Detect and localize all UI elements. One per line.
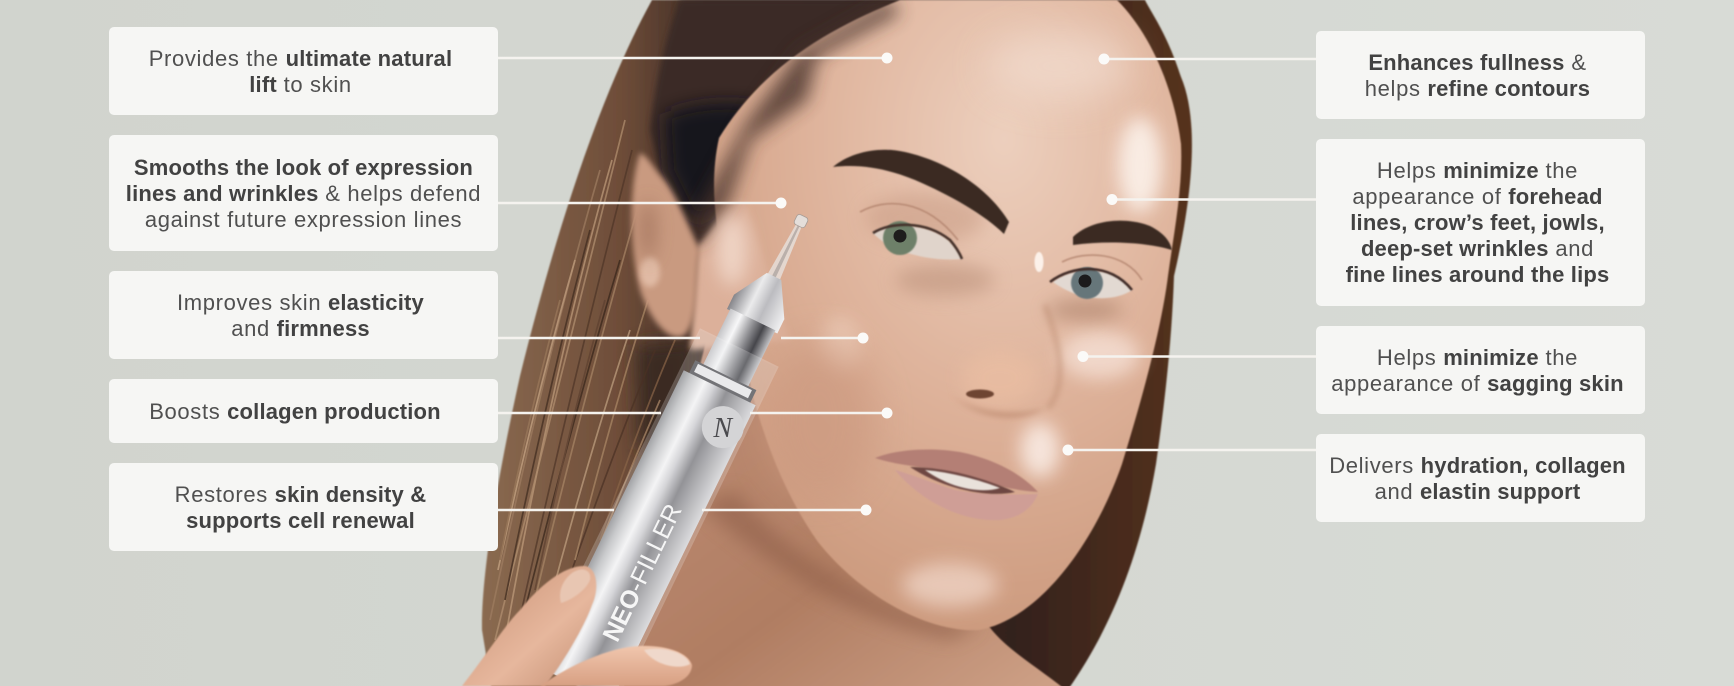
callout: forehead lines and wrinkles <box>1316 139 1645 306</box>
lower lip <box>895 470 1038 520</box>
index finger <box>462 566 596 686</box>
nose <box>948 252 1060 418</box>
right eye <box>1053 270 1132 298</box>
callout: expression lines: lines and wrinkles & helps defend <box>126 180 481 206</box>
chrome cone <box>727 264 799 334</box>
callout: fullness and contours: helps refine contours <box>1365 76 1590 100</box>
callout: hydration, collagen, elastin <box>1316 434 1645 522</box>
temple skin <box>690 200 790 350</box>
callout: ultimate natural lift: lift to skin <box>249 72 352 96</box>
callout: hydration, collagen, elastin: Delivers hydration, collagen <box>1329 452 1626 478</box>
jaw shadow on neck <box>700 490 980 640</box>
mouth opening <box>910 467 1015 494</box>
callout: expression lines <box>109 135 498 251</box>
callout: skin density <box>109 463 498 551</box>
product name: NEO-FILLER <box>597 499 688 646</box>
callout: collagen production: Boosts collagen production <box>149 398 441 424</box>
collar ring <box>688 360 756 404</box>
thumbnail <box>644 649 690 667</box>
callout: sagging skin: Helps minimize the <box>1377 344 1578 370</box>
callout: skin density: Restores skin density & <box>175 482 426 506</box>
left eye <box>873 225 962 260</box>
hairline shadow <box>690 0 900 247</box>
glass applicator tip <box>766 213 810 283</box>
ear <box>632 153 700 337</box>
callout: sagging skin: appearance of sagging skin <box>1331 370 1624 396</box>
eyes <box>860 204 1142 299</box>
callout: fullness and contours: Enhances fullness & <box>1368 50 1587 74</box>
woman: hair, face and neck <box>482 0 1192 686</box>
clear collar <box>536 329 779 686</box>
callout: collagen production <box>109 379 498 443</box>
callout: elasticity and firmness: and firmness <box>231 316 370 340</box>
fingers holding pen <box>462 566 692 686</box>
callout: fullness and contours <box>1316 31 1645 119</box>
callout: forehead lines and wrinkles: fine lines around the lips <box>1346 262 1609 287</box>
callout: ultimate natural lift: Provides the ultimate natural <box>149 46 452 70</box>
teeth <box>925 470 1000 490</box>
callout: ultimate natural lift <box>109 27 498 115</box>
pen body <box>539 370 756 686</box>
callout: forehead lines and wrinkles: Helps minimize the <box>1377 158 1578 183</box>
callout: forehead lines and wrinkles: deep-set wrinkles and <box>1361 236 1594 261</box>
callout: expression lines: Smooths the look of expression <box>134 154 473 180</box>
callout: expression lines: against future expression lines <box>145 206 462 232</box>
callout: forehead lines and wrinkles: appearance of forehead <box>1352 184 1603 209</box>
face <box>690 0 1181 630</box>
callout: elasticity and firmness: Improves skin elasticity <box>177 290 424 314</box>
hair <box>482 0 1192 686</box>
logo: N <box>712 413 733 444</box>
lips <box>875 450 1038 520</box>
callout: hydration, collagen, elastin: and elastin support <box>1375 478 1580 504</box>
callout: sagging skin <box>1316 326 1645 414</box>
logo <box>695 399 751 455</box>
callout: elasticity and firmness <box>109 271 498 359</box>
neck <box>575 332 1067 686</box>
eyebrows <box>833 150 1172 250</box>
thumb <box>540 646 692 686</box>
callout: skin density: supports cell renewal <box>186 508 415 532</box>
icon: applicator pen <box>536 197 843 686</box>
chrome neck <box>700 309 775 393</box>
callout: forehead lines and wrinkles: lines, crow’s feet, jowls, <box>1350 210 1605 235</box>
fingernail <box>560 569 590 603</box>
upper lip <box>875 450 1038 492</box>
